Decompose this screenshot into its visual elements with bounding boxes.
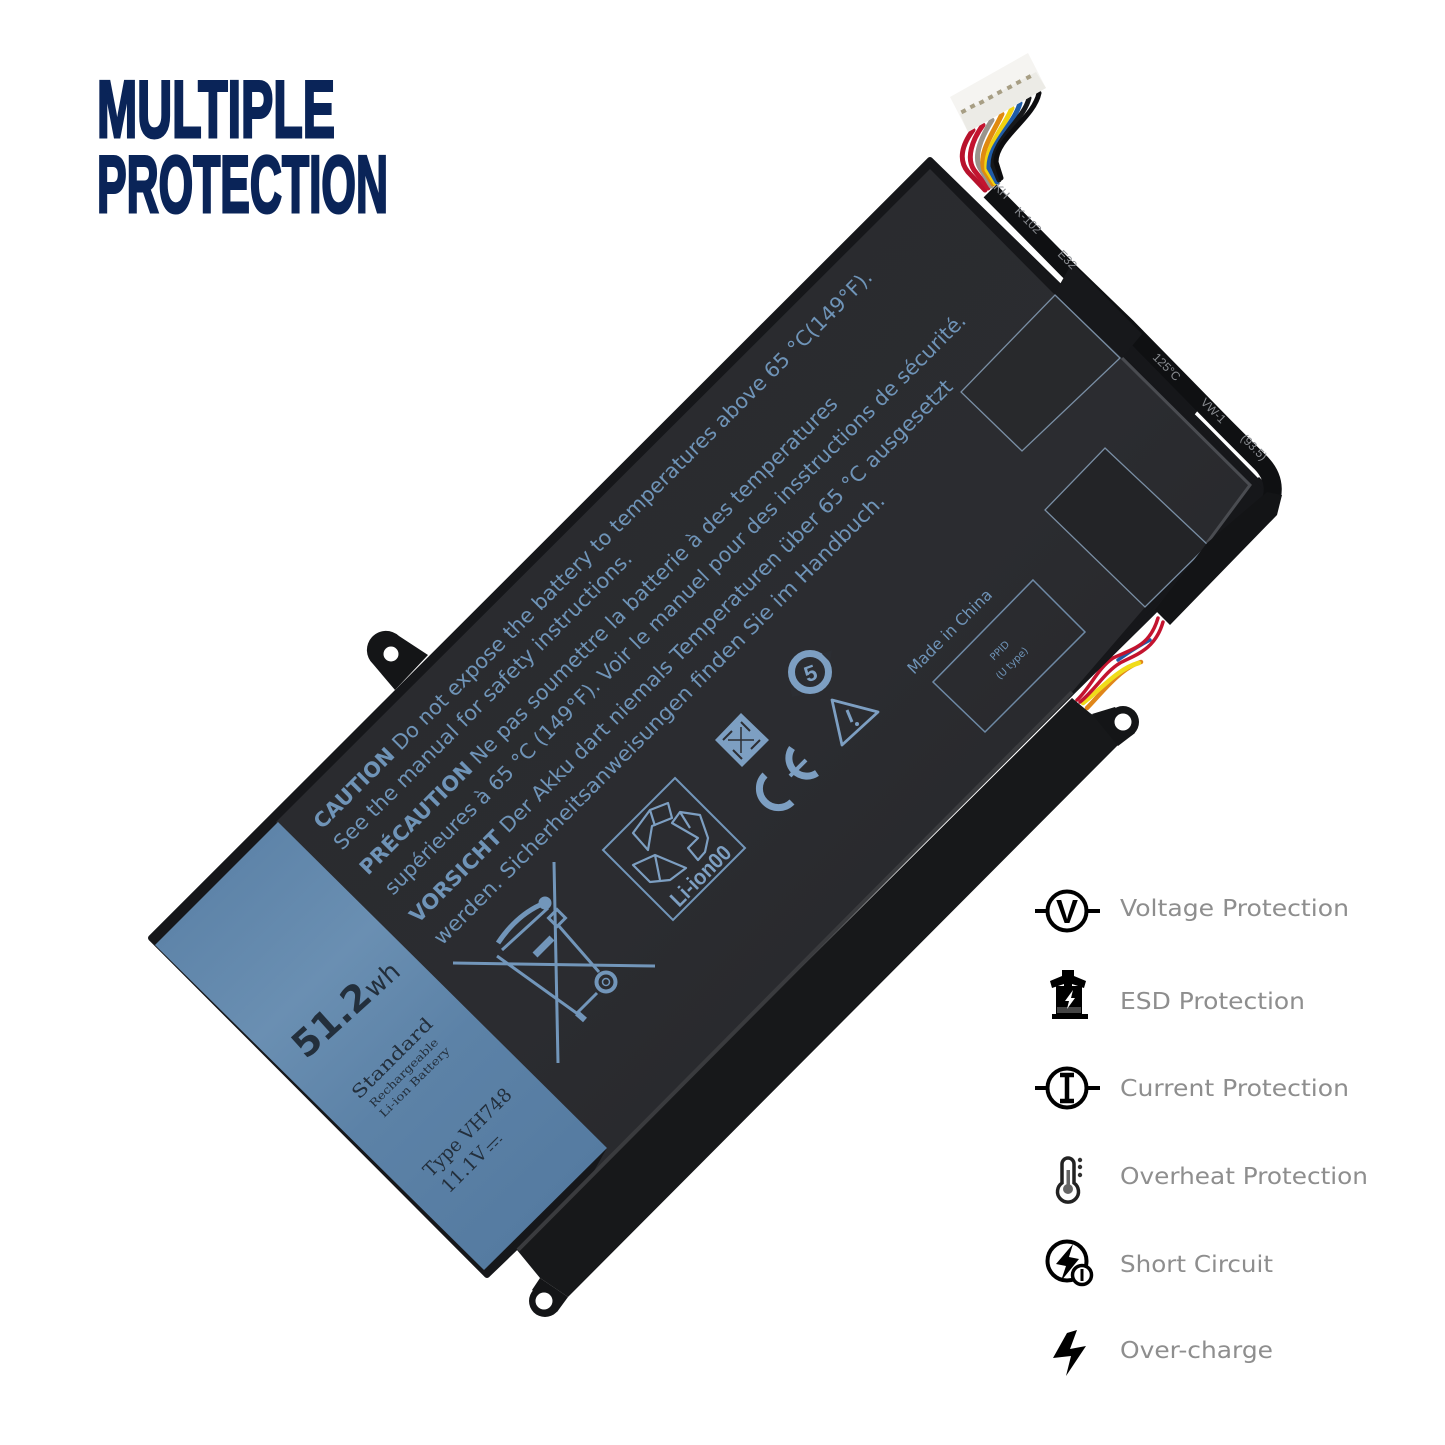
cable sleeve xyxy=(990,191,1282,625)
lower seam xyxy=(518,692,1072,1250)
feature: short circuit xyxy=(1048,1242,1273,1284)
made in China: Made in China xyxy=(903,585,996,678)
icon: ESD xyxy=(1050,970,1088,1019)
cable print: K-102 xyxy=(1012,204,1045,237)
dark panel xyxy=(276,169,1250,1178)
caution text: werden. Sicherheitsanweisungen finden Sie im Handbuch. xyxy=(429,489,890,950)
battery body xyxy=(151,160,1268,1275)
icon: lightning bolt xyxy=(1053,1330,1086,1376)
feature: voltage protection: Voltage Protection xyxy=(1120,896,1349,922)
PPID box xyxy=(933,580,1085,732)
CE mark xyxy=(759,748,817,808)
darker taped panel xyxy=(961,295,1120,451)
label text: 11.1V xyxy=(437,1142,492,1198)
caution text: VORSICHT Der Akku dart niemals Temperaturen über 65 °C ausgesetzt xyxy=(405,375,958,928)
title: PROTECTION xyxy=(97,140,388,230)
icon: thermometer xyxy=(1058,1158,1082,1202)
PPID box: (U type) xyxy=(994,646,1031,682)
feature: ESD protection xyxy=(1050,970,1305,1019)
feature: current protection xyxy=(1035,1068,1349,1108)
white gap behind cable xyxy=(1198,415,1259,477)
feature: overheat protection: Overheat Protection xyxy=(1120,1164,1368,1190)
icon: short circuit xyxy=(1048,1242,1092,1284)
battery photo xyxy=(151,53,1282,1317)
label text: Standard xyxy=(348,1014,437,1104)
recycling Li-ion mark xyxy=(603,778,745,920)
blue label xyxy=(155,822,607,1270)
China recycling mark xyxy=(715,713,769,767)
lower black strip with tabs xyxy=(517,698,1139,1317)
connector wires xyxy=(962,93,1039,190)
cable print: E32 xyxy=(1055,247,1080,272)
cable print: (93.5) xyxy=(1238,431,1270,463)
icon: voltage: V xyxy=(1056,893,1078,930)
caution text: PRÉCAUTION Ne pas soumettre la batterie à des temperatures xyxy=(354,391,842,880)
caution text: See the manual for safety instructions. xyxy=(329,546,637,855)
inner wires at lower right xyxy=(1077,618,1163,708)
warning triangle xyxy=(832,700,878,745)
icon: current xyxy=(1035,1068,1100,1108)
label text: Rechargeable xyxy=(367,1036,441,1110)
cable print: 125°C xyxy=(1150,350,1184,384)
feature: ESD protection: ESD Protection xyxy=(1120,989,1305,1015)
crossed-out bin icon xyxy=(453,862,655,1063)
mounting tab: upper left xyxy=(367,631,428,690)
label text xyxy=(283,948,517,1198)
icon: voltage xyxy=(1035,892,1100,930)
cable print: VW-1 xyxy=(1198,395,1229,426)
mounting tab: bottom xyxy=(529,1278,568,1317)
label text: Type VH748 xyxy=(419,1084,517,1182)
feature: voltage protection xyxy=(1035,892,1349,930)
recycling Li-ion mark: Li-ion00 xyxy=(665,840,736,912)
recycle 5 symbol xyxy=(790,650,832,697)
mounting tab: right xyxy=(1092,706,1139,746)
cable print xyxy=(991,180,1270,463)
label text: Li-ion Battery xyxy=(377,1044,453,1120)
caution text: supérieures à 65 °C (149°F). Voir le manuel pour des insstructions de sécurité. xyxy=(380,308,971,900)
black fill behind cable xyxy=(1112,330,1200,420)
feature: current protection: Current Protection xyxy=(1120,1076,1349,1102)
feature: over-charge xyxy=(1053,1330,1273,1376)
PPID box: PPID xyxy=(988,639,1012,663)
title: MULTIPLE xyxy=(97,65,335,155)
recycle 5 symbol: 5 xyxy=(800,660,821,687)
feature: short circuit: Short Circuit xyxy=(1120,1252,1273,1278)
feature: overheat protection xyxy=(1058,1158,1368,1202)
caution text: CAUTION Do not expose the battery to temperatures above 65 °C(149°F). xyxy=(309,265,877,834)
cable print: KH xyxy=(991,180,1013,202)
right tape panel xyxy=(1045,448,1208,607)
white connector xyxy=(950,53,1046,132)
label text: 51.2wh xyxy=(283,948,408,1067)
title xyxy=(97,65,388,230)
feature: over-charge: Over-charge xyxy=(1120,1338,1273,1364)
right raised edge xyxy=(1122,358,1250,543)
